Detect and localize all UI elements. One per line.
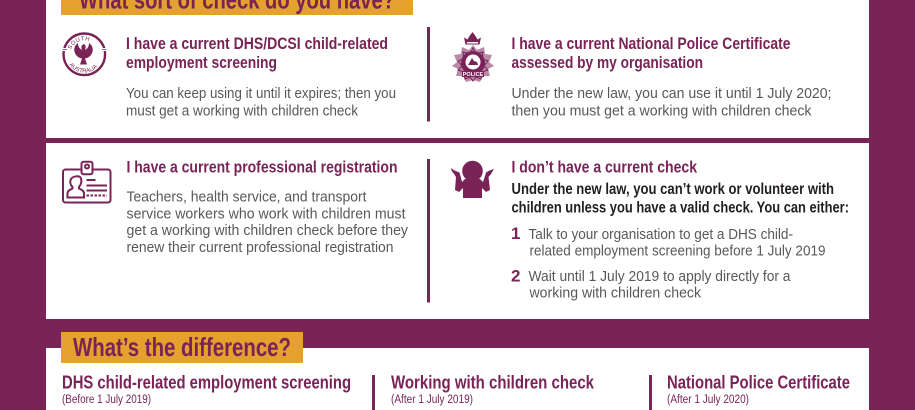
text block: DHS/DCSI screening: I have a current DHS/DCSI child-related — [126, 35, 388, 53]
text block: DHS/DCSI screening — [126, 35, 396, 120]
icon: shrugging child — [451, 161, 494, 198]
text block: National Police Certificate — [512, 35, 832, 120]
list item 1: Talk to your organisation to get a DHS child- — [528, 227, 793, 243]
list item 1: 1 — [511, 224, 520, 243]
column: national police certificate: (After 1 July 2020) — [667, 394, 749, 406]
column: working with children check: (After 1 July 2019) — [391, 394, 473, 406]
text block: no current check: I don’t have a current check — [512, 159, 698, 177]
icon: South Australia crest: AUSTRALIA — [69, 63, 98, 73]
icon: Queensland Police badge — [452, 32, 494, 82]
column: national police certificate — [667, 372, 850, 406]
column: working with children check: Working with children check — [391, 372, 595, 392]
text block: DHS/DCSI screening: You can keep using it until it expires; then you — [126, 86, 396, 102]
text block: National Police Certificate: assessed by my organisation — [512, 54, 703, 72]
text block: National Police Certificate: Under the new law, you can use it until 1 July 2020; — [512, 86, 832, 102]
text block: DHS/DCSI screening: must get a working with children check — [126, 104, 359, 120]
text block: professional registration: service workers who work with children must — [126, 206, 406, 222]
icon: ID card — [63, 162, 110, 202]
icon: South Australia crest: SOUTH — [68, 36, 90, 50]
text block: professional registration: get a working with children check before they — [126, 223, 409, 239]
text block: National Police Certificate: I have a current National Police Certificate — [512, 35, 790, 53]
column: DHS screening: DHS child-related employment screening — [62, 372, 351, 392]
text block: professional registration: renew their current professional registration — [126, 240, 394, 256]
panel: what sort of check, top row — [46, 0, 869, 138]
panel: what sort of check, second row — [46, 143, 869, 319]
column: DHS screening — [62, 372, 351, 406]
column: working with children check — [391, 372, 595, 406]
list item 2: 2 — [511, 266, 520, 286]
text block: professional registration: I have a current professional registration — [126, 159, 398, 177]
text block: professional registration — [126, 159, 409, 256]
text block: no current check: children unless you have a valid check. You can either: — [512, 200, 849, 217]
icon: Queensland Police badge: POLICE — [463, 72, 484, 78]
list item 1: related employment screening before 1 July 2019 — [530, 244, 826, 260]
list item 2: Wait until 1 July 2019 to apply directly for a — [528, 269, 791, 285]
text block: no current check — [512, 159, 849, 217]
list item 2 — [511, 266, 791, 302]
heading banner: what's the difference: What’s the difference? — [73, 332, 291, 362]
column: national police certificate: National Police Certificate — [667, 372, 850, 392]
text block: DHS/DCSI screening: employment screening — [126, 54, 277, 72]
column: DHS screening: (Before 1 July 2019) — [62, 394, 151, 406]
list item 2: working with children check — [529, 286, 702, 302]
panel: what's the difference — [46, 332, 869, 410]
text block: National Police Certificate: then you must get a working with children check — [512, 104, 812, 120]
text block: professional registration: Teachers, health service, and transport — [126, 190, 366, 206]
list item 1 — [511, 224, 826, 260]
icon: South Australia crest — [62, 32, 106, 76]
text block: no current check: Under the new law, you can’t work or volunteer with — [512, 181, 834, 198]
